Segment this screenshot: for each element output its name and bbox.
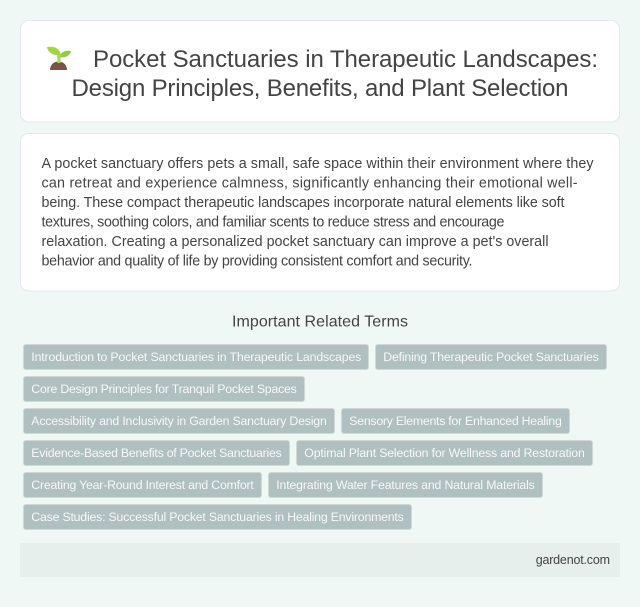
- text block: description: can retreat and experience calmness, significantly enhancing their emotional well-: [42, 176, 578, 192]
- tag: [268, 472, 542, 498]
- tag: Introduction to Pocket Sanctuaries in Therapeutic Landscapes: [31, 350, 361, 364]
- tag: Core Design Principles for Tranquil Pocket Spaces: [31, 382, 297, 396]
- footer credit: gardenot.com: [536, 553, 610, 567]
- tag: Creating Year-Round Interest and Comfort: [31, 478, 254, 492]
- tag: Evidence-Based Benefits of Pocket Sanctuaries: [31, 446, 282, 460]
- tag: [24, 344, 368, 370]
- tag: [342, 408, 570, 434]
- tag: Case Studies: Successful Pocket Sanctuaries in Healing Environments: [31, 510, 404, 524]
- tag: Defining Therapeutic Pocket Sanctuaries: [383, 350, 599, 364]
- tag: Optimal Plant Selection for Wellness and Restoration: [304, 446, 585, 460]
- title: Pocket Sanctuaries in Therapeutic Landscapes:: [93, 46, 598, 73]
- text block: description: behavior and quality of life by providing consistent comfort and security.: [42, 254, 472, 270]
- tag: [376, 344, 606, 370]
- tag list: [24, 344, 606, 530]
- heading: related terms: Important Related Terms: [232, 314, 408, 330]
- tag: [24, 376, 304, 402]
- text block: description: being. These compact therapeutic landscapes incorporate natural elements like soft: [42, 195, 565, 211]
- icon: seedling: [47, 47, 71, 70]
- text block: description: textures, soothing colors, and familiar scents to reduce stress and encourage: [42, 214, 505, 230]
- tag: [296, 440, 592, 466]
- panel: description: [20, 134, 620, 291]
- tag: [24, 440, 290, 466]
- title: Design Principles, Benefits, and Plant Selection: [72, 75, 568, 102]
- text block: description: relaxation. Creating a personalized pocket sanctuary can improve a pet's overall: [42, 234, 548, 250]
- footer: [20, 543, 620, 577]
- tag: [24, 504, 412, 530]
- panel: title card: [20, 20, 620, 122]
- tag: Integrating Water Features and Natural Materials: [276, 478, 535, 492]
- tag: [24, 408, 334, 434]
- tag: [24, 472, 262, 498]
- tag: Sensory Elements for Enhanced Healing: [349, 414, 562, 428]
- tag: Accessibility and Inclusivity in Garden Sanctuary Design: [31, 414, 327, 428]
- title: [72, 46, 598, 102]
- text block: description: A pocket sanctuary offers pets a small, safe space within their environment where they: [42, 156, 594, 172]
- text block: description: [42, 156, 594, 270]
